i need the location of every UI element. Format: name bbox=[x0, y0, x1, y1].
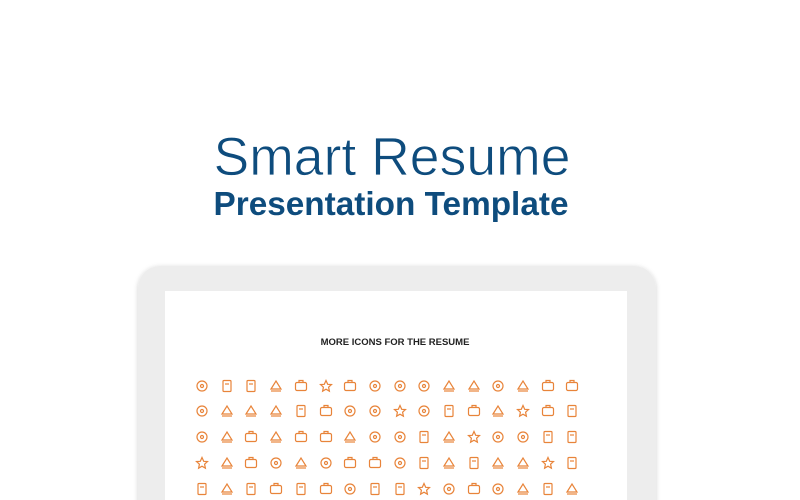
subtitle: Presentation Template: Presentation Template bbox=[214, 185, 568, 222]
icon grid bbox=[196, 380, 578, 494]
screen heading: MORE ICONS FOR THE RESUME bbox=[321, 337, 469, 348]
device mockup bbox=[138, 266, 656, 500]
screen bbox=[165, 291, 627, 500]
title: Smart Resume: Smart Resume bbox=[214, 127, 570, 187]
